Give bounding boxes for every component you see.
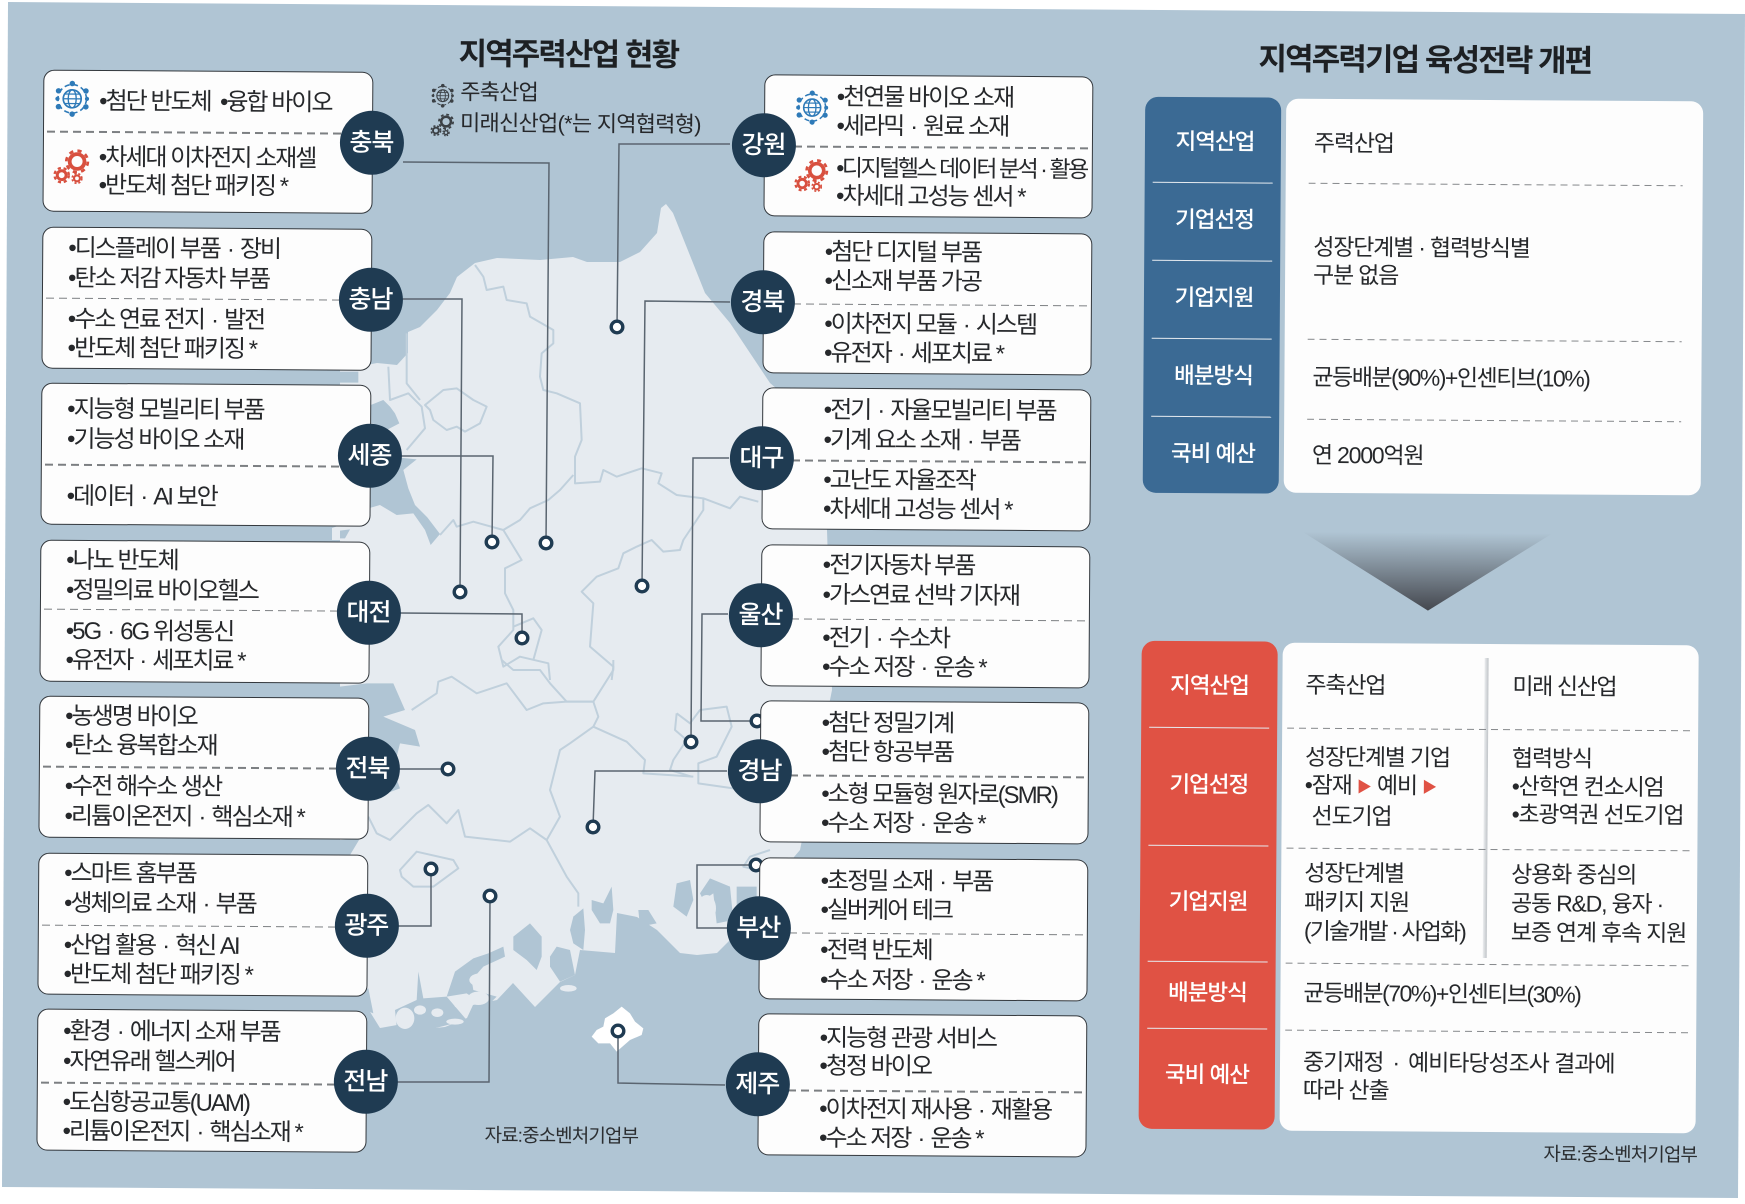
- badge: 광주: [334, 893, 399, 957]
- revamped: R&D support: 보증 연계 후속 지원: [1511, 919, 1686, 946]
- panel: 강원: •천연물 바이오 소재: [837, 84, 1013, 112]
- sidebar: current categories: 배분방식: [1174, 363, 1253, 388]
- revamped: selection by cooperation: 협력방식: [1512, 745, 1592, 772]
- panel: 전남: •도심항공교통(UAM): [63, 1089, 249, 1117]
- panel: 제주: •수소 저장 · 운송 *: [819, 1125, 983, 1153]
- panel: 전북: •수전 해수소 생산: [65, 773, 221, 801]
- revamped: selection by growth stage: 성장단계별 기업: [1305, 744, 1450, 771]
- current: allocation text: 균등배분(90%)+인센티브(10%): [1312, 364, 1589, 392]
- revamped: R&D support: 상용화 중심의: [1511, 861, 1636, 888]
- badge: 광주: 광주: [344, 911, 388, 939]
- badge: 울산: 울산: [738, 601, 782, 629]
- legend text: future industry: 미래신산업(*는 지역협력형): [460, 110, 701, 137]
- arrow: down transition: [1312, 536, 1544, 611]
- badge: 전남: [333, 1050, 398, 1114]
- panel: 대전: •유전자 · 세포치료 *: [66, 646, 245, 674]
- revamped: stage support: (기술개발 · 사업화): [1304, 918, 1465, 945]
- icon: globe network: [55, 80, 90, 117]
- panel: 대구: •차세대 고성능 센서 *: [823, 496, 1012, 524]
- panel: 울산: •전기자동차 부품: [823, 551, 974, 579]
- panel: 전남: •환경 · 에너지 소재 부품: [63, 1018, 280, 1046]
- badge: 울산: [728, 583, 793, 647]
- sidebar: current categories: 지역산업: [1175, 129, 1254, 154]
- badge: 경북: 경북: [740, 288, 785, 316]
- panel: 제주: •지능형 관광 서비스: [820, 1025, 996, 1053]
- panel: 광주: •생체의료 소재 · 부품: [64, 889, 256, 918]
- islet near west coast: [332, 522, 350, 540]
- revamped: future industry: 미래 신산업: [1512, 673, 1616, 700]
- sidebar: revamped categories: 배분방식: [1168, 980, 1247, 1005]
- icon: gears: [794, 159, 828, 192]
- legend text: core industry: 주축산업: [460, 79, 538, 105]
- panel: 충남: •수소 연료 전지 · 발전: [68, 305, 264, 334]
- panel: 광주: •스마트 홈부품: [64, 859, 196, 887]
- panel: current strategy: [1284, 99, 1703, 495]
- panel: 부산: •전력 반도체: [820, 936, 932, 964]
- sidebar: current categories: 기업선정: [1175, 207, 1254, 232]
- panel: revamped strategy: [1280, 642, 1699, 1133]
- panel: 전남: [36, 1009, 367, 1153]
- revamped: stage support: 성장단계별: [1304, 860, 1404, 886]
- panel: 충북: •반도체 첨단 패키징 *: [99, 172, 287, 200]
- panel: 대구: [761, 387, 1091, 531]
- panel: 충남: [41, 226, 372, 370]
- panel: 부산: •실버케어 테크: [820, 896, 952, 924]
- icon: globe network: [796, 90, 828, 125]
- panel: 부산: [758, 857, 1088, 1001]
- panel: 제주: [757, 1013, 1087, 1157]
- badge: 경남: [727, 739, 792, 803]
- sidebar: revamped categories: 국비 예산: [1165, 1062, 1249, 1087]
- revamped: budget text: 중기재정 · 예비타당성조사 결과에: [1303, 1049, 1615, 1077]
- panel: 부산: •초정밀 소재 · 부품: [821, 867, 992, 895]
- panel: 충남: •탄소 저감 자동차 부품: [68, 264, 269, 293]
- badge: 강원: 강원: [741, 131, 786, 159]
- revamped: selection by cooperation: •초광역권 선도기업: [1512, 801, 1683, 828]
- divider: two columns: [1483, 658, 1489, 958]
- revamped: R&D support: [1511, 861, 1686, 946]
- title: regional industries: 지역주력산업 현황: [458, 36, 678, 72]
- source: strategy: 자료:중소벤처기업부: [1543, 1144, 1697, 1166]
- panel: 세종: •기능성 바이오 소재: [67, 426, 243, 454]
- revamped: budget text: 따라 산출: [1303, 1077, 1389, 1103]
- revamped: selection by growth stage: [1305, 744, 1450, 829]
- panel: 세종: [40, 383, 371, 527]
- panel: 충북: [42, 70, 373, 214]
- panel: 충북: •차세대 이차전지 소재셀: [99, 144, 315, 172]
- badge: 대전: [336, 580, 401, 644]
- badge: 충북: [339, 111, 404, 175]
- panel: 광주: •산업 활용 · 혁신 AI: [64, 931, 239, 959]
- revamped: budget text: [1303, 1049, 1615, 1103]
- revamped: selection by growth stage: 선도기업: [1312, 803, 1392, 829]
- sidebar: current categories: 기업지원: [1174, 285, 1253, 310]
- panel: 세종: •지능형 모빌리티 부품: [67, 396, 264, 424]
- badge: 경남: 경남: [737, 757, 781, 785]
- panel: 대구: •기계 요소 소재 · 부품: [823, 427, 1020, 455]
- current: budget text: 연 2000억원: [1312, 442, 1423, 469]
- legend icon: future industry: [430, 114, 454, 136]
- revamped: selection by cooperation: [1512, 745, 1683, 828]
- revamped: stage support: [1304, 860, 1466, 945]
- badge: 대구: [729, 426, 794, 490]
- panel: 경북: •신소재 부품 가공: [824, 267, 981, 295]
- panel: 경북: •첨단 디지털 부품: [825, 238, 981, 266]
- panel: 전북: [38, 696, 369, 840]
- panel: 대전: •5G · 6G 위성통신: [66, 617, 233, 645]
- badge: 충남: 충남: [348, 285, 393, 313]
- badge: 충북: 충북: [349, 129, 394, 157]
- current: selection text: 성장단계별 · 협력방식별: [1313, 234, 1530, 261]
- badge: 세종: [337, 424, 402, 488]
- badge: 충남: [338, 267, 403, 331]
- panel: 전북: •리튬이온전지 · 핵심소재 *: [64, 803, 304, 831]
- panel: 울산: [760, 544, 1090, 688]
- panel: 강원: •디지털헬스 데이터 분석·활용: [836, 155, 1087, 182]
- panel: 울산: •가스연료 선박 기자재: [822, 581, 1019, 609]
- panel: 경남: •소형 모듈형 원자로(SMR): [821, 781, 1057, 809]
- panel: 경남: •첨단 항공부품: [821, 739, 953, 767]
- revamped: selection by growth stage: •잠재 ▶ 예비 ▶: [1305, 772, 1437, 799]
- panel: 경남: •첨단 정밀기계: [822, 710, 953, 738]
- panel: 경남: [759, 700, 1089, 844]
- panel: 강원: •차세대 고성능 센서 *: [836, 183, 1025, 211]
- panel: 대구: •전기 · 자율모빌리티 부품: [824, 397, 1056, 425]
- badge: 부산: [726, 896, 791, 960]
- panel: 대전: [39, 539, 370, 683]
- panel: 경남: •수소 저장 · 운송 *: [821, 810, 985, 838]
- panel: 광주: [37, 852, 368, 996]
- badge: 대전: 대전: [346, 598, 390, 626]
- badge: 제주: [725, 1052, 790, 1116]
- badge: 전남: 전남: [343, 1068, 387, 1096]
- panel: 충남: •디스플레이 부품 · 장비: [68, 234, 280, 263]
- revamped: stage support: 패키지 지원: [1304, 889, 1409, 915]
- panel: 강원: [763, 74, 1093, 218]
- badge: 강원: [731, 113, 796, 177]
- panel: 전남: •리튬이온전지 · 핵심소재 *: [62, 1118, 302, 1146]
- panel: 강원: •세라믹 · 원료 소재: [836, 113, 1008, 141]
- revamped: core industry: 주축산업: [1305, 672, 1385, 698]
- legend icon: core industry: [432, 84, 454, 108]
- sidebar: revamped categories: 기업선정: [1169, 772, 1248, 797]
- panel: 전북: •농생명 바이오: [65, 703, 197, 731]
- panel: 제주: •이차전지 재사용 · 재활용: [819, 1096, 1051, 1124]
- sidebar: revamped categories: 지역산업: [1170, 673, 1249, 698]
- panel: 대구: •고난도 자율조작: [823, 467, 975, 495]
- panel: 대전: •정밀의료 바이오헬스: [66, 576, 258, 605]
- badge: 경북: [730, 270, 795, 334]
- panel: 제주: •청정 바이오: [819, 1053, 931, 1080]
- revamped: R&D support: 공동 R&D, 융자 ·: [1511, 890, 1663, 917]
- badge: 전북: [335, 737, 400, 801]
- sidebar: current categories: [1143, 97, 1281, 494]
- badge: 세종: 세종: [347, 442, 392, 470]
- current: selection text: 구분 없음: [1313, 262, 1398, 288]
- sidebar: current categories: 국비 예산: [1171, 441, 1255, 466]
- icon: gears: [54, 149, 90, 184]
- panel: 울산: •수소 저장 · 운송 *: [822, 653, 986, 681]
- sidebar: revamped categories: 기업지원: [1169, 889, 1248, 914]
- panel: 충남: •반도체 첨단 패키징 *: [68, 334, 256, 363]
- panel: 광주: •반도체 첨단 패키징 *: [63, 960, 252, 989]
- badge: 전북: 전북: [345, 755, 389, 783]
- panel: 경북: •유전자 · 세포치료 *: [824, 339, 1003, 367]
- badge: 대구: 대구: [739, 444, 783, 472]
- source: map: 자료:중소벤처기업부: [484, 1126, 638, 1147]
- badge: 부산: 부산: [736, 914, 780, 942]
- panel: 대전: •나노 반도체: [66, 546, 178, 574]
- legend: [430, 79, 701, 137]
- panel: 경북: •이차전지 모듈 · 시스템: [824, 310, 1036, 339]
- panel: 세종: •데이터 · AI 보안: [67, 483, 217, 511]
- current: selection text: [1313, 234, 1530, 288]
- panel: 전북: •탄소 융복합소재: [65, 732, 217, 760]
- panel: 충북: •첨단 반도체 •융합 바이오: [99, 88, 332, 116]
- panel: 전남: •자연유래 헬스케어: [63, 1048, 235, 1076]
- current: core industry text: 주력산업: [1314, 130, 1394, 156]
- revamped: selection by cooperation: •산학연 컨소시엄: [1512, 773, 1664, 800]
- panel: 울산: •전기 · 수소차: [822, 624, 949, 652]
- sidebar: revamped categories: [1139, 641, 1278, 1130]
- badge: 제주: 제주: [735, 1070, 779, 1098]
- panel: 부산: •수소 저장 · 운송 *: [820, 966, 984, 994]
- revamped: allocation text: 균등배분(70%)+인센티브(30%): [1303, 980, 1580, 1008]
- panel: 경북: [762, 231, 1092, 375]
- title: strategy revamp: 지역주력기업 육성전략 개편: [1258, 41, 1591, 79]
